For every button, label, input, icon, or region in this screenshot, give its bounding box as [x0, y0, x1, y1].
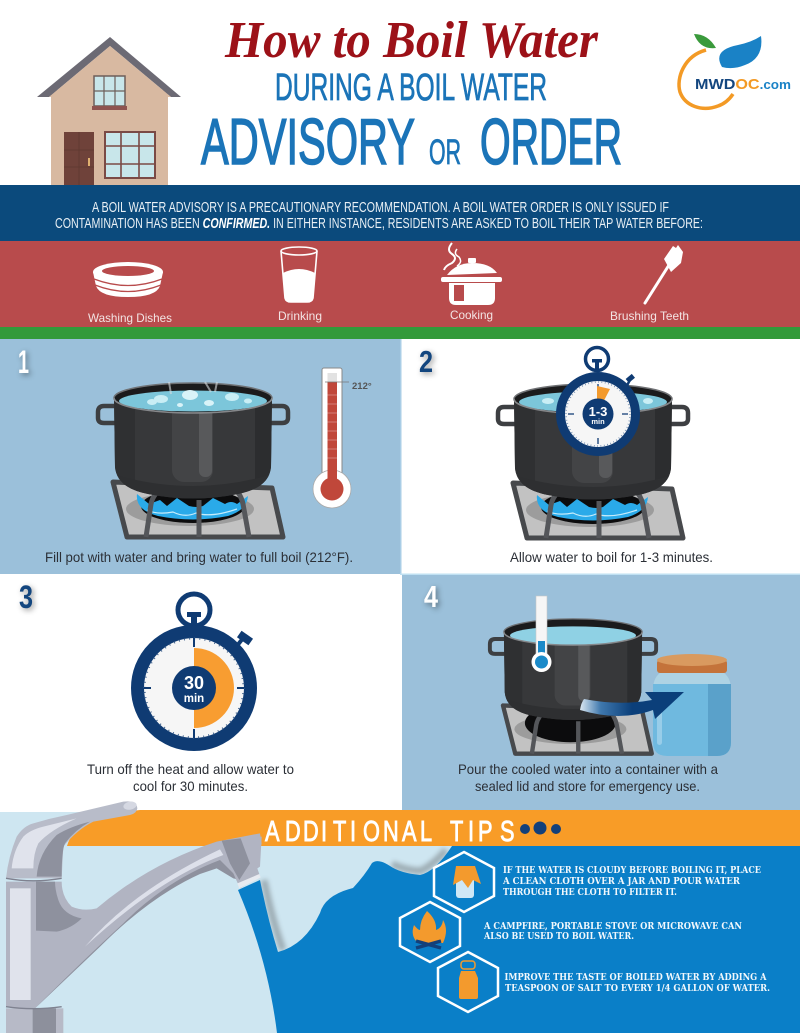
icon: dishes [93, 262, 163, 297]
title: How to Boil Water [224, 12, 599, 69]
caption step 3: cool for 30 minutes. [133, 778, 248, 794]
tip 1: jar with cloth: A CLEAN CLOTH OVER A JAR AND POUR WATER [502, 877, 740, 887]
heading: ADDITIONAL TIPS [265, 816, 515, 848]
tip 3: salt shaker [438, 952, 770, 1012]
caption step 4 [458, 761, 718, 794]
label: washing dishes: Washing Dishes [88, 311, 172, 325]
panel: additional tips [0, 801, 800, 1033]
caption step 3 [87, 761, 294, 794]
label: cooking: Cooking [450, 308, 493, 322]
tip 1: jar with cloth: THROUGH THE CLOTH TO FILTER IT. [503, 888, 677, 898]
panel: step 1 [0, 339, 400, 574]
label: drinking: Drinking [278, 309, 322, 323]
caption step 4: Pour the cooled water into a container with a [458, 761, 718, 777]
intro band [0, 185, 800, 241]
step number 3: 3 [19, 579, 33, 615]
icon: glass of water [281, 247, 317, 302]
tip 3: salt shaker: TEASPOON OF SALT TO EVERY 1/4 GALLON OF WATER. [505, 984, 770, 994]
tip 1: jar with cloth [434, 852, 761, 912]
green divider band [0, 327, 800, 339]
icon: stopwatch 1-3 min: min [591, 417, 605, 426]
step number 1: 1 [18, 344, 29, 380]
panel: step 3 [0, 575, 400, 810]
icon: cooled pot on burner [490, 619, 656, 754]
icon: stopwatch 30 min: 30 [184, 673, 204, 693]
icon: sealed water jar [653, 654, 731, 756]
water flood [238, 846, 800, 1033]
icon: toothbrush [645, 245, 683, 303]
icon: thermometer 212 degrees [313, 368, 372, 508]
caption step 4: sealed lid and store for emergency use. [475, 778, 700, 794]
icon: boiling pot on burner [498, 384, 688, 538]
step number 4: 4 [424, 579, 439, 614]
tip 2: campfire: ALSO BE USED TO BOIL WATER. [483, 932, 634, 942]
caption step 3: Turn off the heat and allow water to [87, 761, 294, 777]
panel: step 4 [402, 575, 800, 810]
caption step 1: Fill pot with water and bring water to full boil (212°F). [45, 549, 353, 565]
panel: uses of boiled water [0, 241, 800, 327]
icon: stopwatch 1-3 min [560, 348, 636, 452]
icon: faucet [6, 801, 262, 1033]
icon: boiling pot on burner [98, 382, 288, 537]
icon: stopwatch 1-3 min: 1-3 [589, 404, 607, 419]
logo [679, 34, 791, 108]
title: OR [429, 133, 461, 172]
orange heading band [67, 810, 800, 846]
icon: thermometer 212 degrees: 212° [352, 381, 372, 392]
panel: step 2 [400, 339, 800, 575]
icon: cooking pot [441, 243, 502, 305]
icon: house [37, 37, 181, 185]
step number 2: 2 [419, 344, 433, 379]
tip 2: campfire [400, 902, 742, 962]
icon: stopwatch 30 min: min [184, 693, 204, 705]
title: ADVISORY [201, 105, 415, 178]
dots [520, 822, 561, 834]
water shadow [264, 850, 446, 950]
tip 1: jar with cloth: IF THE WATER IS CLOUDY BEFORE BOILING IT, PLACE [503, 866, 761, 876]
title: ORDER [480, 105, 622, 178]
tip 2: campfire: A CAMPFIRE, PORTABLE STOVE OR MICROWAVE CAN [483, 922, 742, 932]
title [201, 12, 622, 178]
title: DURING A BOIL WATER [275, 67, 547, 109]
label: brushing teeth: Brushing Teeth [610, 309, 689, 323]
icon: stopwatch 30 min [138, 594, 253, 744]
logo: MWDOC.com [695, 76, 791, 93]
caption step 2: Allow water to boil for 1-3 minutes. [510, 549, 713, 565]
tip 3: salt shaker: IMPROVE THE TASTE OF BOILED WATER BY ADDING A [504, 973, 767, 983]
arrow [580, 692, 684, 719]
icon: cold thermometer [532, 596, 552, 672]
